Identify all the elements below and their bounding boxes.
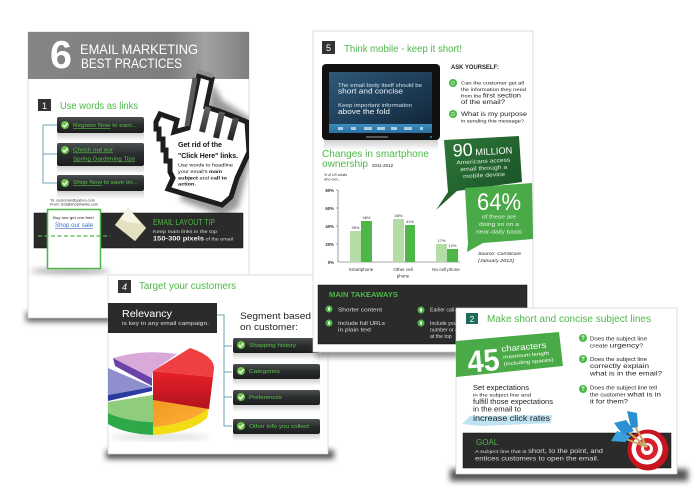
header band bbox=[28, 32, 249, 79]
ask yourself questions: from the first section bbox=[461, 92, 521, 100]
section 5 heading: 5 bbox=[326, 43, 331, 53]
green banner: 45 characters bbox=[456, 332, 563, 380]
ask yourself questions: the information they need bbox=[461, 87, 526, 93]
callout: 90 million: MILLION bbox=[475, 145, 513, 158]
green banner: 45 characters: (including spaces) bbox=[504, 357, 554, 368]
email addresses: From: test@shopthanks.com bbox=[50, 202, 98, 206]
email preview box: Buy one get one free! bbox=[53, 215, 94, 220]
smartphone ownership heading: Changes in smartphone bbox=[322, 149, 429, 160]
bar chart: smartphone ownership: Other cell bbox=[393, 267, 413, 272]
question list: correctly explain bbox=[590, 363, 649, 370]
relevancy banner bbox=[108, 303, 217, 333]
section 4 heading bbox=[118, 280, 236, 293]
bar chart: smartphone ownership: Smartphone bbox=[349, 267, 374, 272]
main takeaways panel: Include your phone bbox=[430, 321, 474, 327]
segment button: shopping history bbox=[233, 338, 320, 360]
relevancy banner: is key in any email campaign. bbox=[122, 321, 209, 327]
smartphone ownership heading: ownership bbox=[322, 159, 368, 170]
link button: spring gardening tips bbox=[57, 143, 144, 174]
section 5 heading: Think mobile - keep it short! bbox=[344, 43, 462, 55]
question list: ? bbox=[581, 336, 585, 342]
callout: 64 percent: near-daily basis bbox=[476, 230, 522, 236]
section 2 heading: 2 bbox=[470, 315, 475, 324]
question list: create urgency ? bbox=[590, 342, 643, 350]
relevancy banner: Relevancy bbox=[122, 309, 172, 320]
bar chart: smartphone ownership: % of US adults bbox=[324, 173, 347, 177]
question list: ? bbox=[581, 357, 585, 363]
segment button: categories: Categories bbox=[249, 369, 280, 375]
ask yourself questions: ASK YOURSELF: bbox=[451, 64, 499, 71]
header band: EMAIL MARKETING bbox=[80, 41, 198, 57]
hand callout text: "Click Here" links. bbox=[178, 151, 238, 160]
email preview box: Shop our sale bbox=[55, 222, 93, 229]
question list: Does the subject line bbox=[590, 336, 647, 342]
link button: spring gardening tips: Check out our bbox=[73, 148, 113, 154]
section 4 heading: Target your customers bbox=[139, 281, 236, 292]
bar chart: smartphone ownership: who own... bbox=[324, 178, 341, 182]
main takeaways panel: MAIN TAKEAWAYS bbox=[329, 290, 398, 299]
goal banner: entices customers to open the email. bbox=[475, 456, 599, 462]
section 5 heading bbox=[322, 41, 462, 55]
green banner: 45 characters: characters bbox=[501, 340, 547, 354]
callout: 90 million: mobile device bbox=[463, 172, 505, 180]
main takeaways panel: at the top bbox=[430, 334, 452, 340]
bar chart: smartphone ownership: 40% bbox=[325, 224, 334, 229]
question list: what is in the email? bbox=[589, 370, 662, 378]
green banner: 45 characters: maximum length bbox=[503, 351, 550, 361]
header band: BEST PRACTICES bbox=[81, 55, 182, 71]
bar chart: smartphone ownership: phone bbox=[397, 274, 410, 278]
question list: Does the subject line tell bbox=[590, 386, 657, 392]
bar chart: smartphone ownership bbox=[324, 173, 460, 278]
question list: ? bbox=[581, 387, 585, 393]
callout: 64 percent: 64% bbox=[477, 189, 521, 216]
segment heading bbox=[240, 311, 311, 332]
email addresses bbox=[50, 198, 98, 206]
email layout tip banner: 150-300 pixels of the email bbox=[153, 236, 233, 242]
callout: 90 million: 90 bbox=[452, 140, 473, 161]
question list: the customer what is in bbox=[590, 392, 661, 398]
link button: spring gardening tips: Spring Gardening Tips bbox=[73, 156, 135, 162]
bar chart: smartphone ownership: 12% bbox=[448, 243, 457, 248]
panel: think mobile page bbox=[313, 31, 533, 357]
tablet illustration bbox=[322, 64, 440, 150]
panel: target your customers page bbox=[106, 275, 334, 459]
bar chart: smartphone ownership: 80% bbox=[325, 188, 334, 193]
segment button: other info you collect: Other info you collect bbox=[249, 424, 309, 430]
email layout tip banner: EMAIL LAYOUT TIP bbox=[153, 218, 215, 227]
smartphone ownership heading: 2011-2012 bbox=[372, 163, 394, 168]
hand callout text: action. bbox=[178, 182, 196, 188]
connector lines bbox=[217, 315, 232, 426]
panel: 6 email marketing best practices page bbox=[26, 32, 250, 322]
question list bbox=[579, 334, 662, 406]
link button: shop now bbox=[57, 175, 144, 199]
section 4 heading: 4 bbox=[122, 282, 127, 292]
ask yourself questions: D bbox=[451, 81, 455, 87]
segment button: other info you collect bbox=[233, 419, 320, 441]
ask yourself questions: What is my purpose bbox=[461, 111, 527, 118]
hand callout text bbox=[178, 140, 238, 188]
email addresses: To: customer@yahoo.com bbox=[50, 198, 95, 202]
segment button: categories bbox=[233, 364, 320, 386]
bar chart: smartphone ownership: 0% bbox=[328, 260, 334, 265]
email preview box bbox=[30, 210, 110, 274]
connector lines bbox=[43, 125, 57, 183]
ask yourself questions: in sending this message? bbox=[461, 118, 524, 124]
green banner: 45 characters: 45 bbox=[466, 342, 501, 380]
main takeaways panel bbox=[318, 285, 527, 344]
icon: target with darts bbox=[611, 411, 668, 470]
link button: register now bbox=[57, 117, 144, 141]
ask yourself questions: of the email? bbox=[461, 99, 505, 106]
icon: envelope bbox=[115, 208, 146, 241]
tablet illustration: short and concise bbox=[338, 88, 403, 96]
smartphone ownership heading bbox=[322, 149, 429, 170]
section 1 heading: 1 bbox=[42, 101, 47, 111]
bar chart: smartphone ownership: 17% bbox=[437, 238, 446, 243]
callout: 90 million: email through a bbox=[460, 165, 508, 173]
tablet illustration: above the fold bbox=[338, 109, 390, 116]
expectations text: in the subject line and bbox=[473, 392, 531, 398]
expectations text: fulfill those expectations bbox=[473, 399, 554, 406]
main takeaways panel: number or address bbox=[430, 328, 474, 334]
ask yourself questions: Can the customer get all bbox=[461, 80, 524, 86]
main takeaways panel: Shorter content bbox=[338, 308, 383, 314]
bar chart: smartphone ownership: 35% bbox=[351, 225, 360, 230]
callout: 64 percent: of these are bbox=[482, 214, 516, 220]
bar chart: smartphone ownership: 20% bbox=[325, 242, 334, 247]
segment heading: on customer: bbox=[240, 322, 298, 332]
bar chart: smartphone ownership: 41% bbox=[406, 219, 414, 224]
segment button: preferences bbox=[233, 390, 320, 412]
bar chart: smartphone ownership: 46% bbox=[362, 215, 371, 220]
question list: it for them? bbox=[590, 398, 628, 406]
goal banner: GOAL bbox=[476, 438, 499, 447]
ask yourself questions: D bbox=[451, 112, 455, 118]
callout: 90 million bbox=[436, 136, 522, 210]
link button: shop now: Shop Now to save on... bbox=[73, 180, 138, 186]
goal banner bbox=[463, 433, 671, 468]
hand callout text: Use words to headline bbox=[178, 162, 233, 168]
tablet illustration: The email body itself should be bbox=[338, 83, 422, 89]
hand callout text: your email's main bbox=[178, 169, 222, 175]
bar chart: smartphone ownership: No cell phone bbox=[432, 267, 460, 272]
tablet illustration: Keep important information bbox=[338, 103, 412, 109]
callout: 64 percent bbox=[465, 183, 533, 252]
bar chart: smartphone ownership: 60% bbox=[325, 206, 334, 211]
hand callout text: Get rid of the bbox=[178, 140, 222, 149]
main takeaways panel: in plain text bbox=[338, 328, 372, 334]
email layout tip banner: Keep main links in the top bbox=[153, 229, 217, 235]
icon: pointing hand cursor bbox=[156, 71, 250, 216]
panel: subject lines page bbox=[450, 308, 688, 481]
section 2 heading: Make short and concise subject lines bbox=[487, 313, 651, 325]
section 1 heading: Use words as links bbox=[60, 100, 138, 112]
segment heading: Segment based bbox=[240, 311, 311, 321]
expectations text: in the email to bbox=[473, 406, 521, 414]
main takeaways panel: Include full URLs bbox=[338, 321, 385, 327]
header band: 6 bbox=[50, 34, 72, 77]
source note: Source: ComScore bbox=[478, 251, 522, 256]
bar chart: smartphone ownership: 48% bbox=[394, 213, 403, 218]
email layout tip banner bbox=[34, 213, 243, 248]
source note: (January 2012) bbox=[478, 258, 515, 263]
pie chart bbox=[108, 348, 214, 440]
expectations text: increase click rates bbox=[473, 413, 550, 423]
segment button: preferences: Preferences bbox=[249, 395, 282, 401]
expectations text: Set expectations bbox=[473, 385, 530, 392]
segment button: shopping history: Shopping history bbox=[249, 343, 296, 349]
goal banner: A subject line that is short, to the point, and bbox=[475, 448, 604, 455]
section 1 heading bbox=[38, 99, 138, 112]
main takeaways panel: Earlier call-to-action bbox=[430, 308, 476, 314]
expectations text bbox=[462, 385, 554, 426]
callout: 64 percent: doing so on a bbox=[479, 222, 520, 228]
callout: 90 million: Americans access bbox=[456, 158, 511, 166]
question list: Does the subject line bbox=[590, 357, 647, 363]
hand callout text: subject and call to bbox=[178, 176, 227, 182]
link button: register now: Register Now to earn... bbox=[73, 123, 137, 129]
source note bbox=[478, 251, 522, 263]
ask yourself questions bbox=[449, 64, 527, 124]
